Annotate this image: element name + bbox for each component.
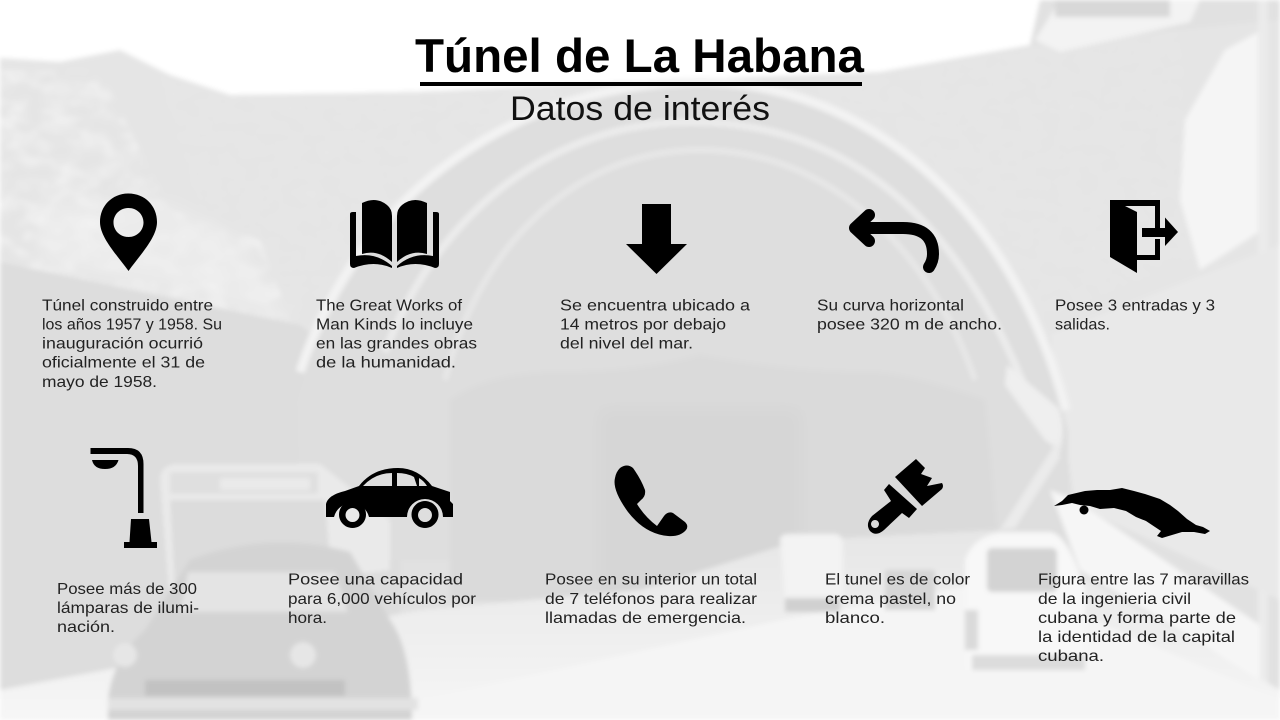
text: civil engineering wonder: la identidad de la capital (1038, 629, 1235, 646)
text: telephones: Posee en su interior un total (545, 572, 757, 588)
text: exits: Posee 3 entradas y 3 (1055, 298, 1215, 314)
hillside (0, 20, 1280, 340)
text: vehicle capacity: hora. (288, 610, 327, 627)
text: great works: The Great Works of (316, 298, 463, 314)
text: depth: 14 metros por debajo (560, 316, 726, 334)
text: construction dates (42, 298, 222, 391)
text: telephones (545, 572, 758, 627)
text: great works: en las grandes obras (316, 336, 477, 352)
arches (300, 82, 1066, 410)
icon: open book (350, 200, 439, 268)
text: civil engineering wonder: Figura entre las 7 maravillas (1038, 572, 1249, 588)
post right (1258, 0, 1268, 720)
tunnel face (296, 84, 1070, 560)
text: great works: Man Kinds lo incluye (316, 316, 473, 334)
old car (108, 543, 412, 720)
subtitle: Datos de interés (510, 90, 770, 128)
title: Túnel de La Habana (415, 29, 865, 82)
panel: lamps (57, 448, 199, 636)
right rock (1180, 30, 1262, 270)
icon: curved return arrow (855, 215, 933, 267)
text: great works (316, 298, 477, 372)
portal bands right (1005, 365, 1063, 450)
panel: depth (560, 204, 750, 352)
title block (415, 29, 865, 128)
text: civil engineering wonder (1038, 572, 1249, 665)
text: civil engineering wonder: cubana y forma parte de (1038, 610, 1236, 627)
icon: street lamp (90, 448, 157, 548)
text: depth: Se encuentra ubicado a (560, 298, 750, 314)
icon: location pin (100, 194, 157, 271)
icon: exit door (1110, 200, 1178, 273)
text: exits: salidas. (1055, 316, 1110, 334)
panel: colour (825, 459, 971, 627)
white van far (780, 534, 843, 600)
text: lamps (57, 581, 199, 636)
bus (160, 464, 390, 600)
text: colour: blanco. (825, 610, 885, 627)
panel: construction dates (42, 194, 222, 391)
rock light base (40, 200, 292, 325)
panel: exits (1055, 200, 1215, 334)
text: civil engineering wonder: de la ingenieria civil (1038, 591, 1191, 608)
text: telephones: de 7 teléfonos para realizar (545, 591, 758, 608)
text: lamps: lámparas de ilumi- (57, 600, 199, 617)
icon: car (326, 468, 453, 528)
sign top right (1035, 0, 1200, 52)
right guard rail (1050, 490, 1260, 680)
text: lamps: nación. (57, 619, 115, 636)
title underline (420, 82, 862, 86)
text: exits (1055, 298, 1215, 334)
panel: horizontal curve (817, 215, 1002, 334)
text: vehicle capacity: para 6,000 vehículos por (288, 591, 477, 608)
icon: paint brush (868, 459, 943, 534)
rock texture left (0, 70, 292, 325)
sky (0, 0, 1040, 95)
text: construction dates: los años 1957 y 1958. Su (42, 316, 222, 334)
icon: telephone (615, 466, 687, 536)
panel: great works (316, 200, 477, 372)
text: construction dates: oficialmente el 31 de (42, 354, 205, 372)
tunnel interior (450, 355, 1000, 610)
text: depth (560, 298, 750, 352)
text: depth: del nivel del mar. (560, 336, 693, 352)
left wall (0, 262, 400, 690)
white van near (965, 532, 1085, 670)
text: construction dates: inauguración ocurrió (42, 336, 203, 352)
text: telephones: llamadas de emergencia. (545, 610, 746, 627)
right wall (1050, 245, 1280, 600)
icon: down arrow (626, 204, 687, 274)
grass texture (160, 30, 1190, 320)
road (0, 530, 1280, 720)
panel: vehicle capacity (288, 468, 477, 627)
panel: telephones (545, 466, 758, 627)
text: great works: de la humanidad. (316, 354, 456, 372)
icon: map of Cuba (1054, 488, 1210, 538)
panel: civil engineering wonder (1038, 488, 1249, 665)
text: vehicle capacity: Posee una capacidad (288, 572, 463, 588)
text: civil engineering wonder: cubana. (1038, 648, 1104, 665)
text: colour (825, 572, 971, 627)
text: construction dates: Túnel construido entre (42, 298, 213, 314)
text: colour: crema pastel, no (825, 591, 956, 608)
text: lamps: Posee más de 300 (57, 581, 197, 598)
text: horizontal curve: posee 320 m de ancho. (817, 316, 1002, 334)
text: vehicle capacity (288, 572, 477, 627)
text: horizontal curve (817, 298, 1002, 334)
text: construction dates: mayo de 1958. (42, 374, 157, 391)
text: horizontal curve: Su curva horizontal (817, 298, 964, 314)
text: colour: El tunel es de color (825, 572, 971, 588)
